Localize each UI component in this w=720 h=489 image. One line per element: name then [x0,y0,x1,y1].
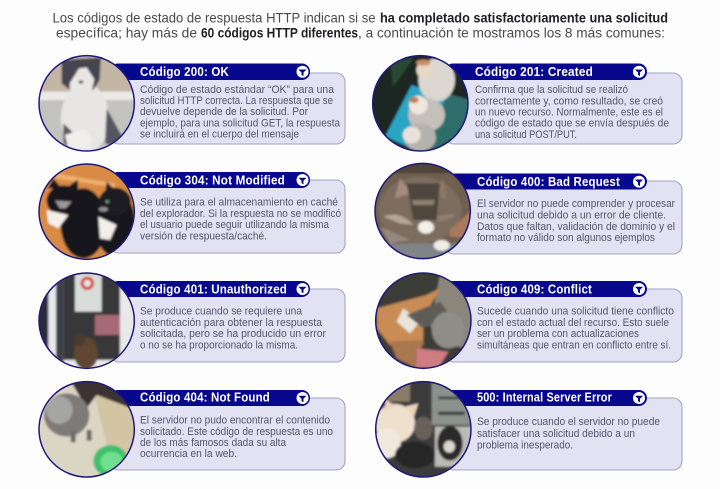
photo: cats among servers [374,380,472,478]
text: descripción 500: Se produce cuando el servidor no puede [477,416,660,428]
text: descripción 400: Datos que faltan, validación de dominio y el [477,221,675,233]
photo: three white kittens [372,54,469,152]
icon: badge 400 [633,176,645,188]
text: descripción 200 [140,84,340,140]
text: descripción 409: simultáneas que entran en conflicto entre sí. [477,340,671,352]
text: descripción 409: ser un problema con actualizaciones [477,328,639,340]
text: descripción 200: solicitud HTTP correcta. La respuesta que se [140,95,333,107]
text: descripción 401: autenticación para obtener la respuesta [140,317,322,329]
icon: badge 401 [296,283,308,295]
text: descripción 201: correctamente y, como resultado, se creó [475,96,663,108]
text: descripción 304: versión de respuesta/caché. [140,230,267,242]
icon: badge 201 [633,66,645,78]
text: descripción 400: formato no válido son algunos ejemplos [477,232,655,244]
panel: código 500 [360,378,682,482]
photo: two cats in conflict [374,272,472,370]
panel: código 200 [35,50,345,157]
title: introduction text: ha completado satisfactoriamente una solicitud [380,10,668,26]
icon: badge 404 [296,392,308,404]
text: descripción 409: con el estado actual del recurso. Esto suele [477,317,669,329]
text: descripción 400: El servidor no puede comprender y procesar [477,198,675,210]
text: descripción 401: o no se ha proporcionado la misma. [140,340,298,352]
heading: código 500: 500: Internal Server Error [477,390,612,404]
icon: badge 200 [296,66,308,78]
panel: código 409 [374,272,683,370]
title: introduction text: específica; hay más de [56,24,197,40]
text: descripción 304: del explorador. Si la respuesta no se modificó [140,208,341,220]
title: introduction text: 60 códigos HTTP diferentes [201,24,358,40]
icon: badge 409 [633,283,645,295]
text: descripción 404: de los más famosos dada su alta [140,437,286,449]
photo: sleeping tabby cat [374,162,472,260]
text: descripción 401: solicitada, pero se ha producido un error [140,328,326,340]
text: descripción 200: Código de estado estándar “OK” para una [140,84,334,96]
heading: código 400: Código 400: Bad Request [477,175,621,189]
text: descripción 304: Se utiliza para el almacenamiento en caché [140,196,338,208]
photo: cat at glass door [38,272,136,370]
text: descripción 200: devuelve depende de la solicitud. Por [140,106,308,118]
heading: código 409: Código 409: Conflict [477,282,593,296]
heading: código 200: Código 200: OK [140,65,229,79]
text: descripción 400: una solicitud debido a un error de cliente. [477,210,666,222]
icon: badge 304 [296,174,308,186]
heading: código 304: Código 304: Not Modified [140,174,285,188]
text: descripción 404: ocurrencia en la web. [140,448,237,460]
text: descripción 400 [477,198,675,244]
text: descripción 201: código de estado que se envía después de [475,118,669,130]
text: descripción 304 [140,196,341,242]
icon: badge 500 [633,392,645,404]
heading: código 201: Código 201: Created [475,65,593,79]
text: descripción 201: un nuevo recurso. Normalmente, este es el [475,106,663,118]
text: descripción 404: El servidor no pudo encontrar el contenido [140,414,330,426]
photo: cat thumbs up [38,54,136,152]
title: introduction text: Los códigos de estado de respuesta HTTP indican si se [52,10,376,26]
text: descripción 500 [477,416,660,452]
text: descripción 201: Confirma que la solicitud se realizó [475,84,628,96]
text: descripción 404: solicitado. Este código de respuesta es uno [140,426,333,438]
panel: código 404 [30,378,345,482]
title: introduction text: , a continuación te mostramos los 8 más comunes: [358,24,665,40]
text: descripción 404 [140,414,333,460]
text: descripción 200: ejemplo, para una solicitud GET, la respuesta [140,118,340,130]
panel: código 400 [370,160,682,267]
text: descripción 304: el usuario puede seguir utilizando la misma [140,219,329,231]
text: descripción 401: Se produce cuando se requiere una [140,306,302,318]
heading: código 404: Código 404: Not Found [140,390,270,404]
text: descripción 500: problema inesperado. [477,440,573,452]
panel: código 304 [35,160,345,267]
text: descripción 401 [140,306,326,352]
panel: código 401 [38,272,346,370]
heading: código 401: Código 401: Unauthorized [140,282,287,296]
photo: cat and green bowl [38,380,136,478]
panel: código 201 [370,50,682,157]
text: descripción 409: Sucede cuando una solicitud tiene conflicto [477,306,674,318]
text: descripción 201: una solicitud POST/PUT. [475,129,577,141]
title: introduction text [52,10,668,40]
text: descripción 200: se incluirá en el cuerpo del mensaje [140,128,299,140]
text: descripción 201 [475,84,669,141]
text: descripción 500: satisfacer una solicitud debido a un [477,428,635,440]
photo: two black cats [38,163,136,260]
text: descripción 409 [477,306,674,352]
